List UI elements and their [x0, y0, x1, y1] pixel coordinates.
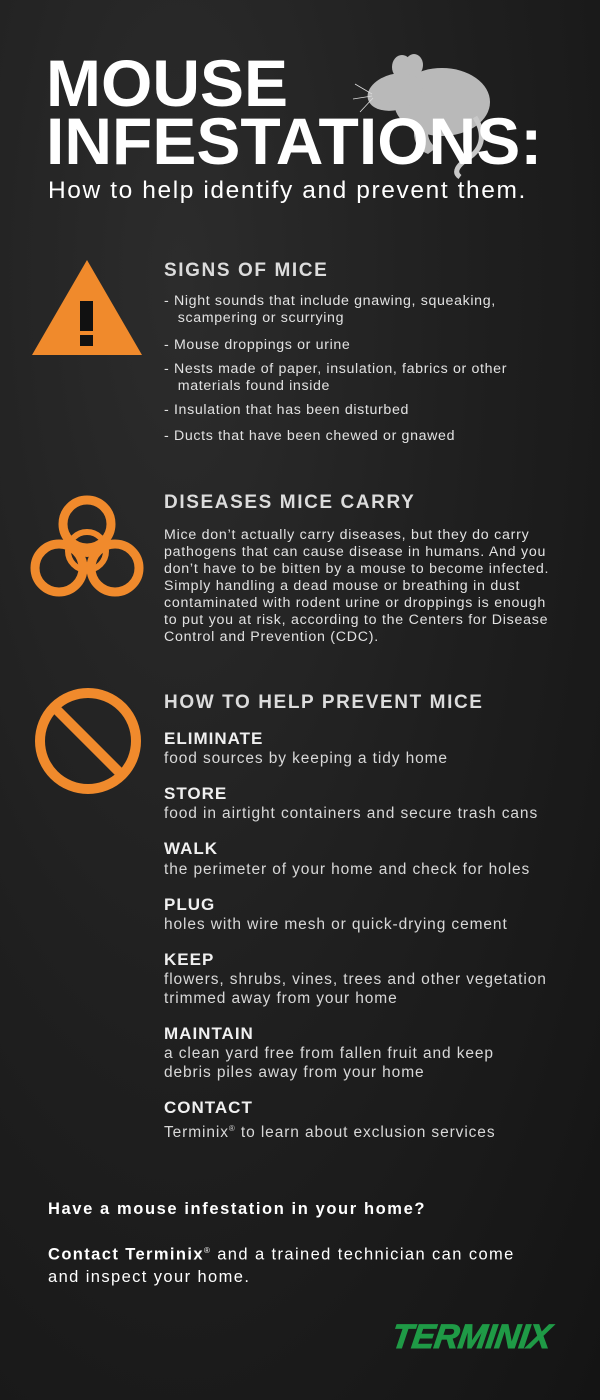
- panel: prevention: Terminix® to learn about exclusion services: [164, 1124, 495, 1141]
- panel: prevention: [164, 692, 547, 1141]
- panel: prevention: PLUG: [164, 895, 215, 914]
- panel: prevention: flowers, shrubs, vines, trees and other vegetation: [164, 971, 547, 988]
- text: - Ducts that have been chewed or gnawed: [164, 428, 455, 444]
- icon: biohazard: [30, 496, 144, 596]
- heading: signs: SIGNS OF MICE: [164, 260, 328, 281]
- panel: prevention: the perimeter of your home and check for holes: [164, 861, 530, 878]
- heading: diseases: DISEASES MICE CARRY: [164, 492, 415, 513]
- paragraph: Mice don’t actually carry diseases, but they do carry: [164, 527, 529, 543]
- panel: prevention: food sources by keeping a tidy home: [164, 750, 448, 767]
- text: - Mouse droppings or urine: [164, 337, 350, 353]
- panel: signs of mice: [164, 260, 496, 326]
- bullet list: scampering or scurrying: [178, 310, 344, 326]
- title: [46, 46, 542, 178]
- bullet list: [164, 293, 496, 326]
- footer text: [48, 1246, 515, 1286]
- paragraph: contaminated with rodent urine or droppings is enough: [164, 595, 546, 611]
- panel: prevention: WALK: [164, 839, 218, 858]
- subtitle: How to help identify and prevent them.: [48, 177, 527, 204]
- bullet list: - Night sounds that include gnawing, squeaking,: [164, 293, 496, 309]
- panel: prevention: holes with wire mesh or quick-drying cement: [164, 916, 508, 933]
- title: INFESTATIONS:: [46, 104, 542, 178]
- footer text: Contact Terminix® and a trained technician can come: [48, 1246, 515, 1264]
- footer question: Have a mouse infestation in your home?: [48, 1200, 426, 1218]
- panel: prevention: STORE: [164, 784, 227, 803]
- paragraph: Control and Prevention (CDC).: [164, 629, 379, 645]
- footer text: and inspect your home.: [48, 1268, 250, 1286]
- text: materials found inside: [178, 378, 330, 394]
- panel: prevention: MAINTAIN: [164, 1024, 254, 1043]
- panel: prevention: ELIMINATE: [164, 729, 263, 748]
- paragraph: to put you at risk, according to the Centers for Disease: [164, 612, 548, 628]
- panel: prevention: a clean yard free from fallen fruit and keep: [164, 1045, 494, 1062]
- paragraph: pathogens that can cause disease in humans. And you: [164, 544, 546, 560]
- icon: warning triangle: [32, 260, 142, 355]
- panel: prevention: debris piles away from your home: [164, 1064, 425, 1081]
- panel: prevention: trimmed away from your home: [164, 990, 398, 1007]
- icon: prohibition: [35, 688, 141, 794]
- paragraph: don’t have to be bitten by a mouse to become infected.: [164, 561, 549, 577]
- panel: prevention: CONTACT: [164, 1098, 253, 1117]
- heading: prevent: HOW TO HELP PREVENT MICE: [164, 692, 484, 713]
- panel: diseases: [164, 492, 549, 645]
- panel: prevention: food in airtight containers and secure trash cans: [164, 805, 538, 822]
- paragraph: Simply handling a dead mouse or breathing in dust: [164, 578, 520, 594]
- panel: prevention: KEEP: [164, 950, 214, 969]
- title: MOUSE: [46, 46, 288, 120]
- text: - Nests made of paper, insulation, fabrics or other: [164, 361, 507, 377]
- text: - Insulation that has been disturbed: [164, 402, 409, 418]
- logo: TERMINIX: [389, 1318, 553, 1356]
- paragraph: [164, 527, 549, 645]
- mouse silhouette: [353, 54, 490, 179]
